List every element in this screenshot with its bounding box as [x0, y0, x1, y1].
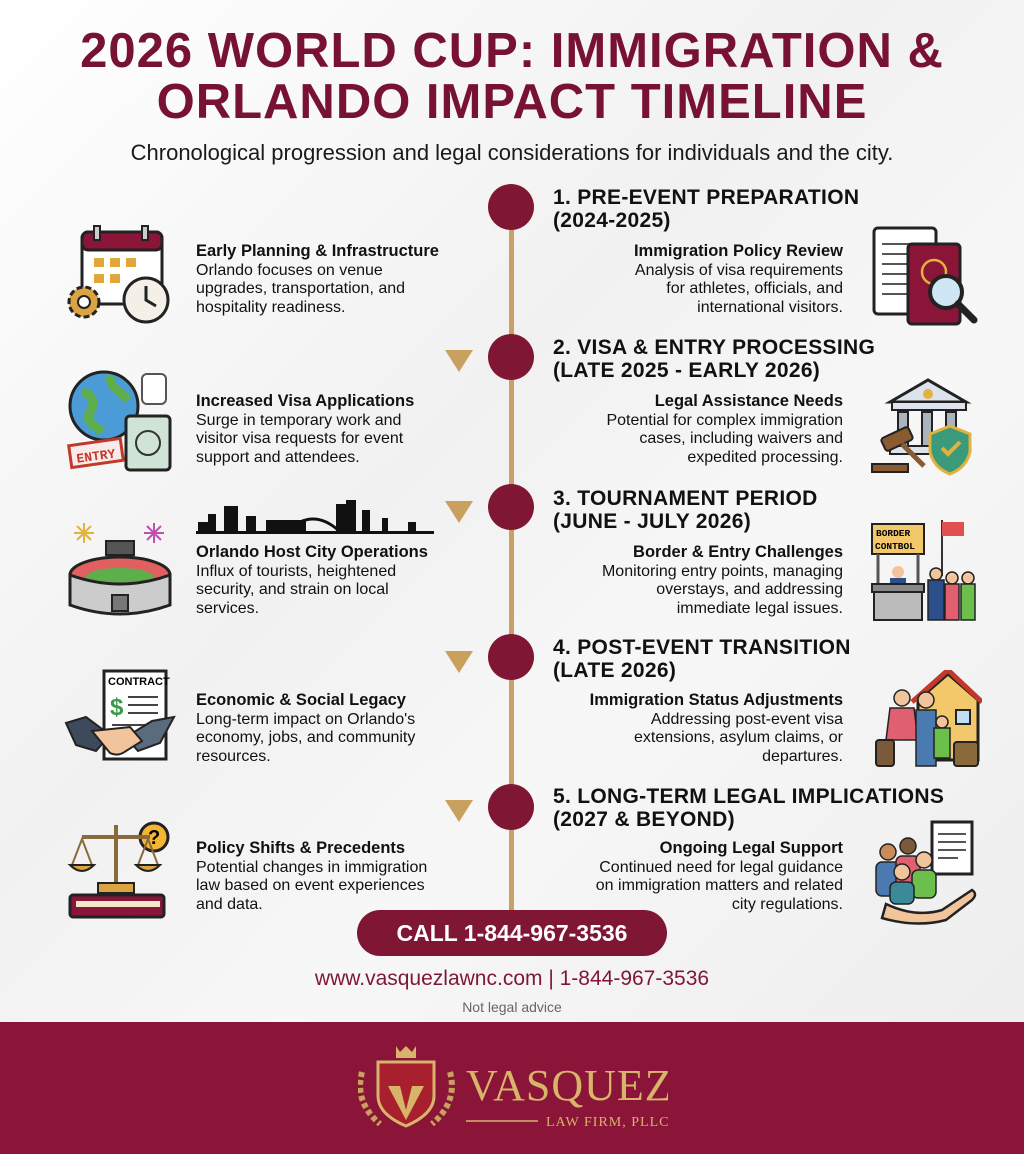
icon: courthouse gavel shield	[871, 378, 972, 476]
CTA button	[357, 910, 667, 956]
icon: globe, passport, entry stamp	[67, 370, 172, 472]
icon: stadium	[68, 523, 172, 616]
left text 3	[196, 543, 428, 616]
right text 1: Analysis of visa requirements	[635, 262, 843, 278]
right text 5: city regulations.	[732, 896, 843, 912]
left text 5: Policy Shifts & Precedents	[196, 839, 405, 857]
right text 4: Addressing post-event visa	[651, 710, 843, 728]
right text 1	[634, 242, 843, 316]
timeline dot 3	[488, 484, 534, 530]
left text 4: economy, jobs, and community	[196, 729, 415, 746]
footer band	[0, 1022, 1024, 1154]
icon: border control	[871, 520, 976, 621]
left text 4	[196, 691, 416, 764]
icon: border control: BORDER	[876, 528, 911, 539]
heading 4: 4. POST-EVENT TRANSITION	[553, 636, 851, 659]
right text 2: cases, including waivers and	[639, 430, 843, 447]
website and phone: www.vasquezlawnc.com | 1-844-967-3536	[315, 967, 709, 990]
left text 4: resources.	[196, 748, 271, 764]
icon: scales and question: ?	[148, 827, 160, 849]
left text 2	[196, 392, 414, 466]
left text 2: Surge in temporary work and	[196, 412, 401, 428]
icon: scales and question	[68, 822, 170, 918]
left text 3: Influx of tourists, heightened	[196, 562, 396, 580]
left text 1: upgrades, transportation, and	[196, 280, 405, 297]
timeline dot 4	[488, 634, 534, 680]
right text 5: on immigration matters and related	[596, 877, 843, 894]
timeline dot 2	[488, 334, 534, 380]
timeline dot 1	[488, 184, 534, 230]
arrow 2	[445, 501, 473, 523]
right text 1: international visitors.	[697, 298, 843, 316]
right text 1: for athletes, officials, and	[666, 280, 843, 297]
icon: skyline	[196, 500, 434, 534]
right text 2: expedited processing.	[687, 448, 843, 466]
left text 5: law based on event experiences	[196, 877, 425, 894]
arrow 3	[445, 651, 473, 673]
logo	[358, 1046, 668, 1130]
icon: contract and handshake: $	[110, 694, 124, 721]
icon: globe, passport, entry stamp: ENTRY	[76, 446, 117, 467]
heading 2	[553, 336, 875, 382]
right text 4	[590, 691, 844, 764]
left text 4: Long-term impact on Orlando's	[196, 710, 415, 728]
heading 4: (LATE 2026)	[553, 659, 676, 682]
left text 3: security, and strain on local	[196, 581, 389, 598]
heading 1: 1. PRE-EVENT PREPARATION	[553, 186, 859, 209]
right text 1: Immigration Policy Review	[634, 242, 843, 260]
left text 2: visitor visa requests for event	[196, 430, 403, 447]
logo: VASQUEZ	[466, 1061, 668, 1110]
icon: calendar with clock and gear	[68, 225, 170, 324]
left text 1: Early Planning & Infrastructure	[196, 242, 439, 260]
right text 4: departures.	[762, 748, 843, 764]
timeline line	[509, 207, 514, 917]
right text 4: Immigration Status Adjustments	[590, 691, 843, 709]
title	[80, 24, 944, 129]
right text 2: Legal Assistance Needs	[655, 392, 843, 410]
logo: LAW FIRM, PLLC	[546, 1115, 668, 1130]
heading 3	[553, 487, 818, 533]
right text 5: Continued need for legal guidance	[599, 858, 843, 876]
left text 1	[196, 242, 439, 316]
left text 3: Orlando Host City Operations	[196, 543, 428, 561]
icon: family and house	[875, 670, 982, 767]
left text 4: Economic & Social Legacy	[196, 691, 406, 709]
right text 2: Potential for complex immigration	[606, 412, 843, 428]
heading 5	[553, 785, 944, 831]
heading 2: (LATE 2025 - EARLY 2026)	[553, 359, 820, 382]
heading 4	[553, 636, 851, 682]
CTA button: CALL 1-844-967-3536	[396, 920, 627, 946]
heading 3: 3. TOURNAMENT PERIOD	[553, 487, 818, 510]
left text 5: Potential changes in immigration	[196, 858, 427, 876]
heading 3: (JUNE - JULY 2026)	[553, 510, 751, 533]
subtitle: Chronological progression and legal considerations for individuals and the city.	[131, 140, 893, 165]
arrow 1	[445, 350, 473, 372]
arrow 4	[445, 800, 473, 822]
disclaimer: Not legal advice	[462, 999, 562, 1015]
right text 4: extensions, asylum claims, or	[634, 729, 843, 746]
left text 3: services.	[196, 600, 259, 616]
right text 5: Ongoing Legal Support	[660, 839, 843, 857]
title: 2026 WORLD CUP: IMMIGRATION &	[80, 24, 944, 78]
icon: group, document, hand	[875, 820, 976, 925]
right text 5	[596, 839, 843, 912]
heading 5: 5. LONG-TERM LEGAL IMPLICATIONS	[553, 785, 944, 808]
right text 3: Monitoring entry points, managing	[602, 562, 843, 580]
icon: contract and handshake: CONTRACT	[108, 676, 170, 688]
right text 3: overstays, and addressing	[656, 581, 843, 598]
heading 1: (2024-2025)	[553, 209, 671, 232]
right text 3	[602, 543, 843, 616]
heading 2: 2. VISA & ENTRY PROCESSING	[553, 336, 875, 359]
timeline dot 5	[488, 784, 534, 830]
icon: documents passport magnifier	[872, 226, 978, 326]
title: ORLANDO IMPACT TIMELINE	[157, 75, 867, 129]
right text 3: Border & Entry Challenges	[633, 543, 843, 561]
right text 3: immediate legal issues.	[677, 600, 843, 616]
left text 2: support and attendees.	[196, 448, 360, 466]
icon: contract and handshake	[64, 670, 176, 760]
left text 2: Increased Visa Applications	[196, 392, 414, 410]
heading 5: (2027 & BEYOND)	[553, 808, 735, 831]
heading 1	[553, 186, 859, 232]
right text 2	[606, 392, 843, 466]
left text 1: hospitality readiness.	[196, 298, 345, 316]
left text 1: Orlando focuses on venue	[196, 262, 383, 278]
left text 5	[196, 839, 427, 912]
left text 5: and data.	[196, 896, 263, 912]
icon: border control: CONTBOL	[875, 541, 915, 552]
